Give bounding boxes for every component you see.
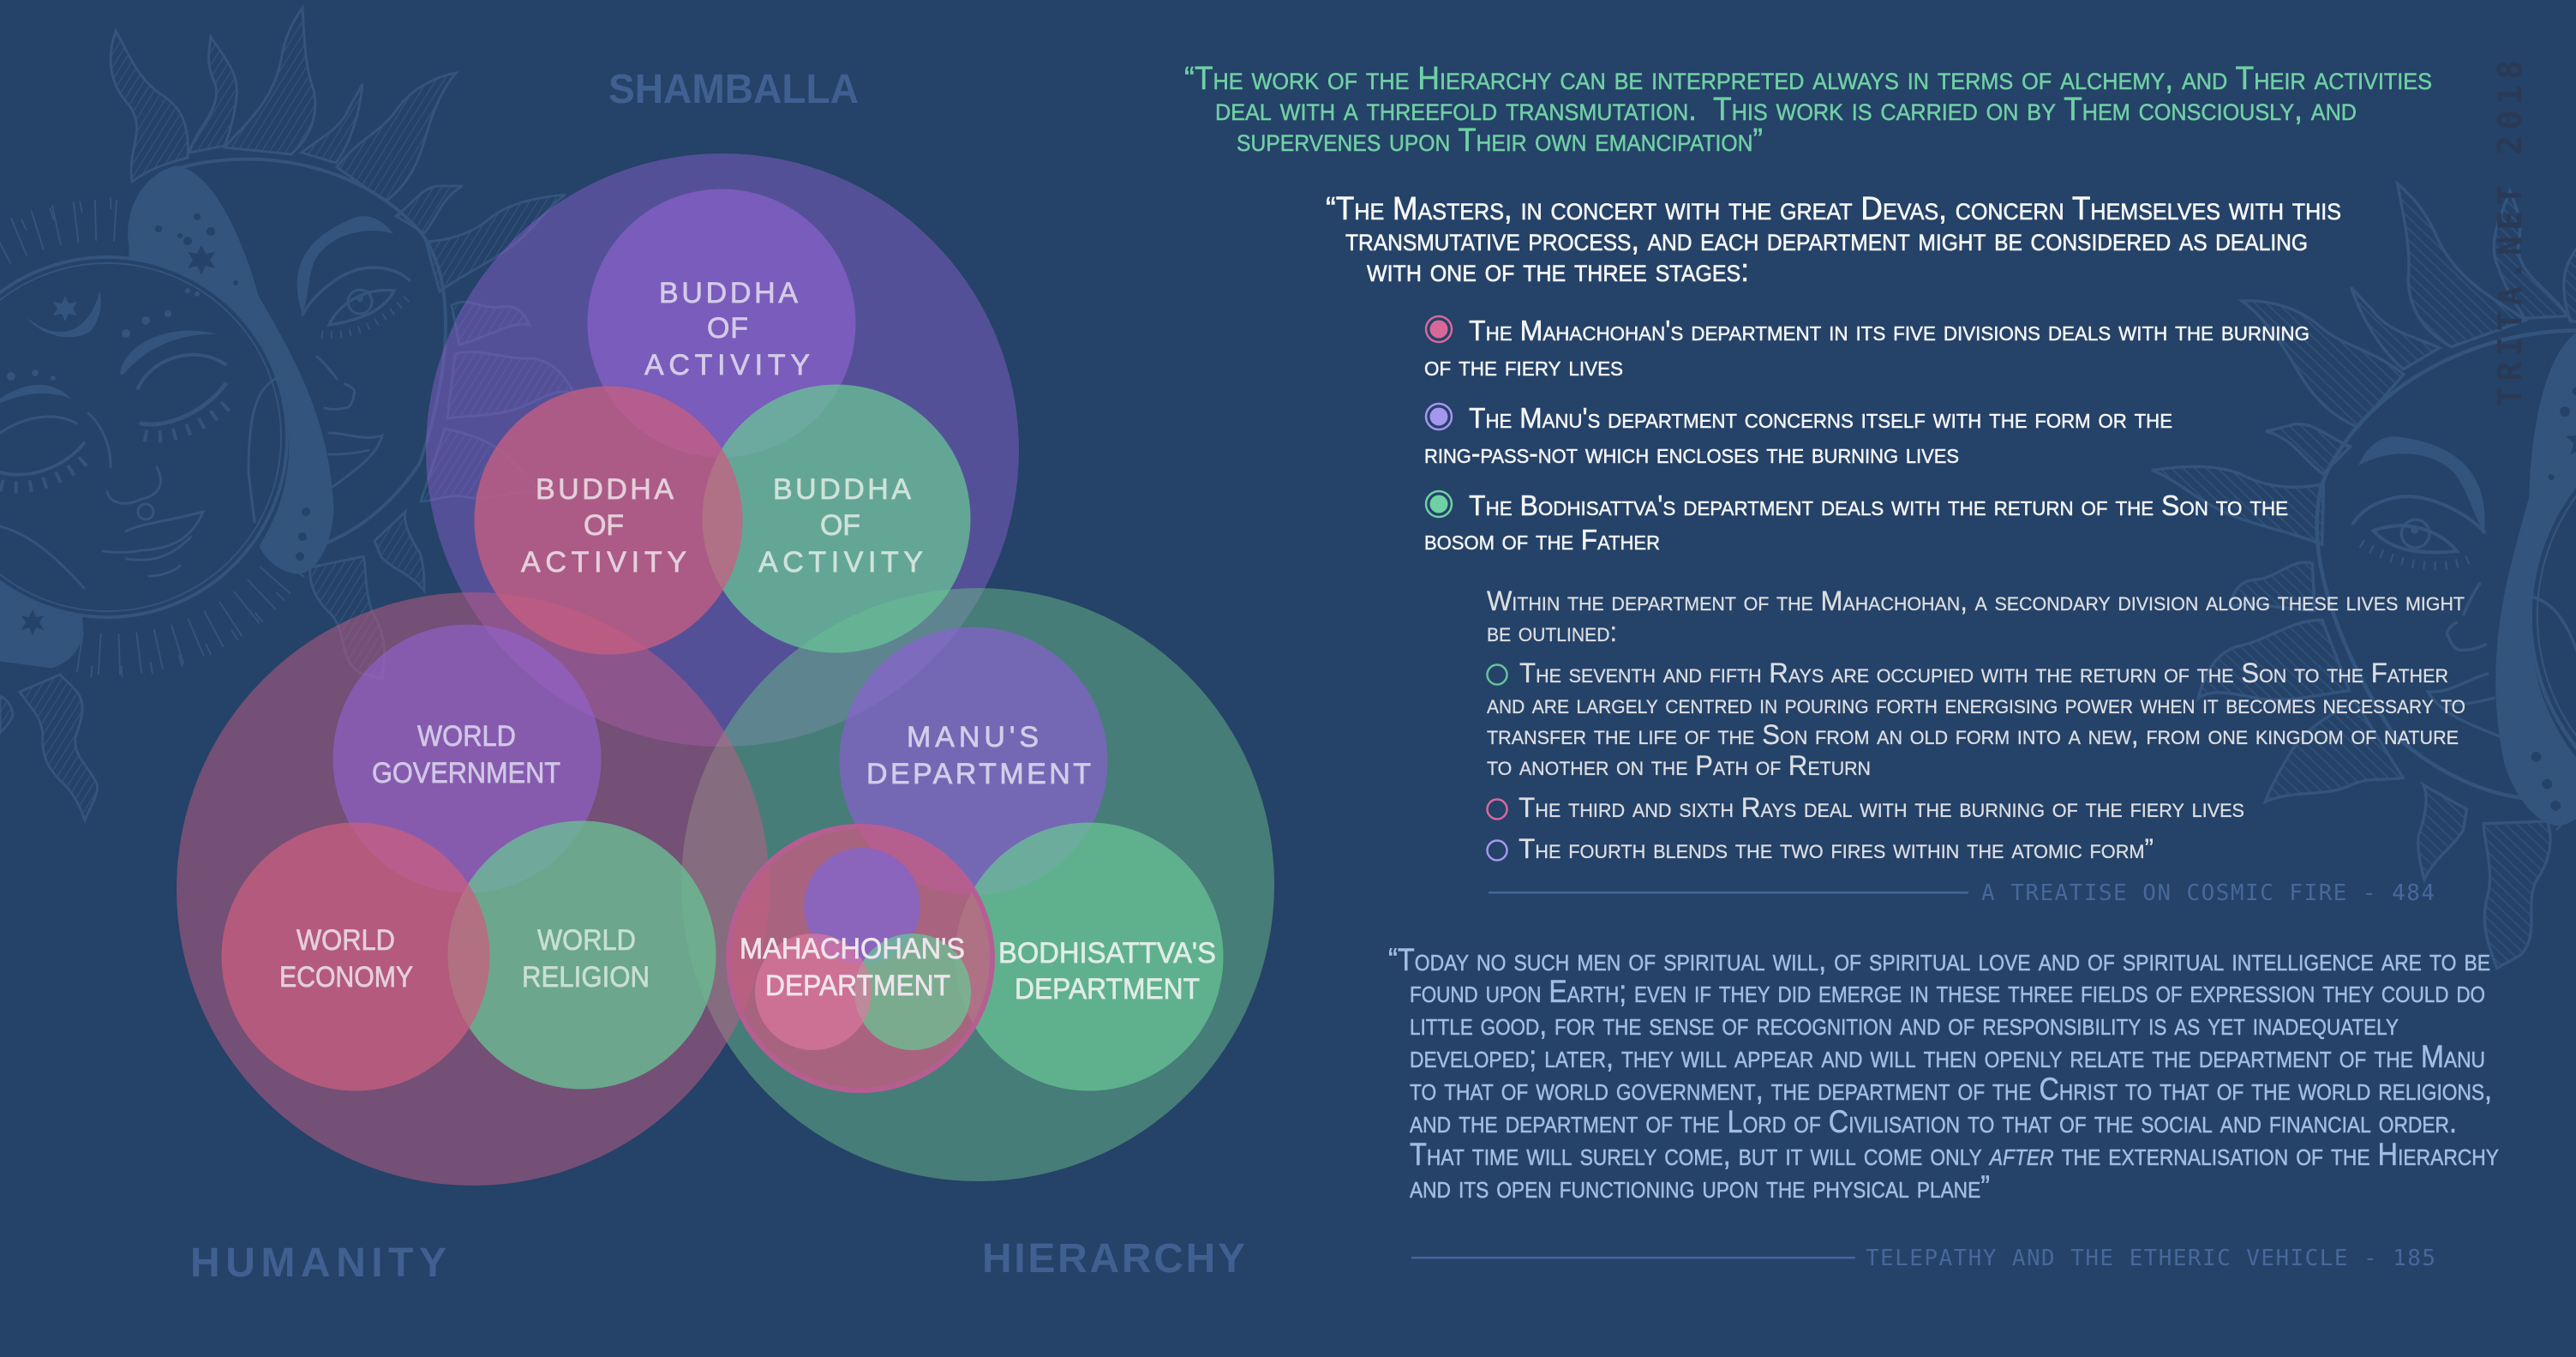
icon: sun and moon illustration, right [2089, 75, 2576, 1183]
icon: violet ring bullet [1488, 840, 1507, 861]
icon: pink bullet [1426, 316, 1452, 342]
label: buddha of activity, left: ACTIVITY [521, 546, 686, 579]
watermark: trita.net 2018: TRITA.NET 2018 [2491, 60, 2529, 406]
chart: three department venn clusters [177, 153, 1274, 1186]
label: mahachohan's department: MAHACHOHAN'S [740, 933, 965, 965]
list item: seventh and fifth rays: transfer the life of the Son from an old form into a new, from one kingdom of nature [1487, 719, 2459, 750]
text block: green alchemy quote: “The work of the Hierarchy can be interpreted always in terms of alchemy, and Their activities [1184, 61, 2432, 97]
label: world government [372, 720, 560, 790]
label: world religion [522, 924, 650, 994]
label: buddha of activity, right: BUDDHA [773, 473, 911, 506]
text block: today no such men quote: That time will surely come, but it will come only after the externalisation of the Hierarchy [1410, 1137, 2499, 1172]
label: buddha of activity, right: ACTIVITY [758, 546, 923, 579]
label: bodhisattva's department [998, 937, 1216, 1006]
list item: seventh and fifth rays: to another on the Path of Return [1487, 750, 1871, 781]
label: world religion: WORLD [537, 924, 636, 957]
label: mahachohan's department [740, 933, 965, 1002]
text block: green alchemy quote [1184, 61, 2432, 159]
list item: manu's department: The Manu's department concerns itself with the form or the [1469, 402, 2172, 434]
label: manu's department: DEPARTMENT [866, 758, 1091, 790]
label: bodhisattva's department: DEPARTMENT [1015, 973, 1200, 1006]
text block: secondary division intro: be outlined: [1487, 616, 1617, 647]
list item: mahachohan's department: The Mahachohan's department in its five divisions deals with the burning [1469, 315, 2309, 346]
circle: hierarchy outer [681, 588, 1274, 1181]
citation: a treatise on cosmic fire: A TREATISE ON COSMIC FIRE - 484 [1981, 880, 2435, 906]
icon: green ring bullet [1488, 665, 1507, 684]
text block: masters quote: transmutative process, and each department might be considered as dealing [1345, 222, 2308, 258]
label: world government: GOVERNMENT [372, 757, 560, 790]
list item: seventh and fifth rays: and are largely centred in pouring forth energising power when it becomes necessary to [1487, 688, 2465, 719]
label: world economy [279, 924, 413, 994]
text block: today no such men quote: and its open functioning upon the physical plane” [1410, 1169, 1990, 1204]
label: buddha of activity, top [644, 277, 810, 381]
text block: secondary division intro: Within the department of the Mahachohan, a secondary division along these lives might [1487, 585, 2465, 616]
label: mahachohan's department: DEPARTMENT [765, 970, 950, 1002]
text block: green alchemy quote: supervenes upon Their own emancipation” [1237, 123, 1763, 159]
icon: pink ring bullet [1488, 799, 1507, 820]
label: world government: WORLD [417, 720, 516, 753]
label: buddha of activity, left [521, 473, 686, 579]
heading: humanity: HUMANITY [190, 1240, 446, 1286]
circle: humanity outer [177, 592, 770, 1186]
list item: fourth ray: The fourth blends the two fires within the atomic form” [1519, 833, 2154, 864]
label: buddha of activity, top: BUDDHA [659, 277, 798, 309]
label: world religion: RELIGION [522, 961, 650, 994]
panel: humanity inner circles [221, 624, 716, 1090]
label: buddha of activity, top: ACTIVITY [644, 349, 810, 381]
label: manu's department: MANU'S [907, 721, 1039, 754]
list item: seventh and fifth rays [1487, 657, 2465, 781]
icon: green bullet [1426, 491, 1452, 517]
list item: bodhisattva's department: bosom of the Father [1424, 524, 1660, 555]
list item: bodhisattva's department [1424, 489, 2288, 555]
panel: shamballa inner circles [475, 189, 970, 655]
label: buddha of activity, right: OF [820, 509, 860, 542]
label: manu's department [866, 721, 1091, 790]
label: buddha of activity, top: OF [707, 312, 748, 345]
list item: manu's department: ring-pass-not which encloses the burning lives [1424, 437, 1959, 469]
text block: masters quote: with one of the three stages: [1367, 253, 1749, 289]
text block: masters quote [1326, 191, 2341, 289]
heading: hierarchy: HIERARCHY [982, 1236, 1245, 1282]
text block: masters quote: “The Masters, in concert with the great Devas, concern Themselves with this [1326, 191, 2341, 227]
circle: shamballa outer [426, 153, 1019, 747]
label: buddha of activity, right [758, 473, 923, 579]
label: world economy: ECONOMY [279, 961, 413, 994]
list item: third and sixth rays: The third and sixth Rays deal with the burning of the fiery lives [1519, 792, 2244, 823]
text block: green alchemy quote: deal with a threefold transmutation. This work is carried on by Them consciously, and [1215, 92, 2357, 128]
list item: seventh and fifth rays: The seventh and fifth Rays are occupied with the return of the Son to the Father [1519, 657, 2448, 688]
list item: mahachohan's department [1424, 315, 2309, 381]
list item: manu's department [1424, 402, 2172, 469]
list item: mahachohan's department: of the fiery lives [1424, 350, 1623, 381]
label: buddha of activity, left: BUDDHA [536, 473, 674, 506]
text block: secondary division intro [1487, 585, 2465, 647]
icon: sun and moon illustration, left [0, 8, 574, 820]
list item: bodhisattva's department: The Bodhisattva's department deals with the return of the Son to the [1469, 489, 2288, 521]
panel: hierarchy inner circles [728, 627, 1224, 1090]
text block: today no such men quote: and the department of the Lord of Civilisation to that of the social and financial order. [1410, 1104, 2457, 1139]
label: bodhisattva's department: BODHISATTVA'S [998, 937, 1216, 970]
label: buddha of activity, left: OF [584, 509, 624, 542]
text block: today no such men quote [1388, 942, 2499, 1204]
citation: telepathy and the etheric vehicle: TELEPATHY AND THE ETHERIC VEHICLE - 185 [1866, 1246, 2435, 1271]
text block: today no such men quote: little good, for the sense of recognition and of responsibility is as yet inadequately [1410, 1006, 2399, 1042]
icon: violet bullet [1426, 404, 1452, 429]
label: world economy: WORLD [297, 924, 395, 957]
heading: shamballa: SHAMBALLA [608, 67, 859, 112]
